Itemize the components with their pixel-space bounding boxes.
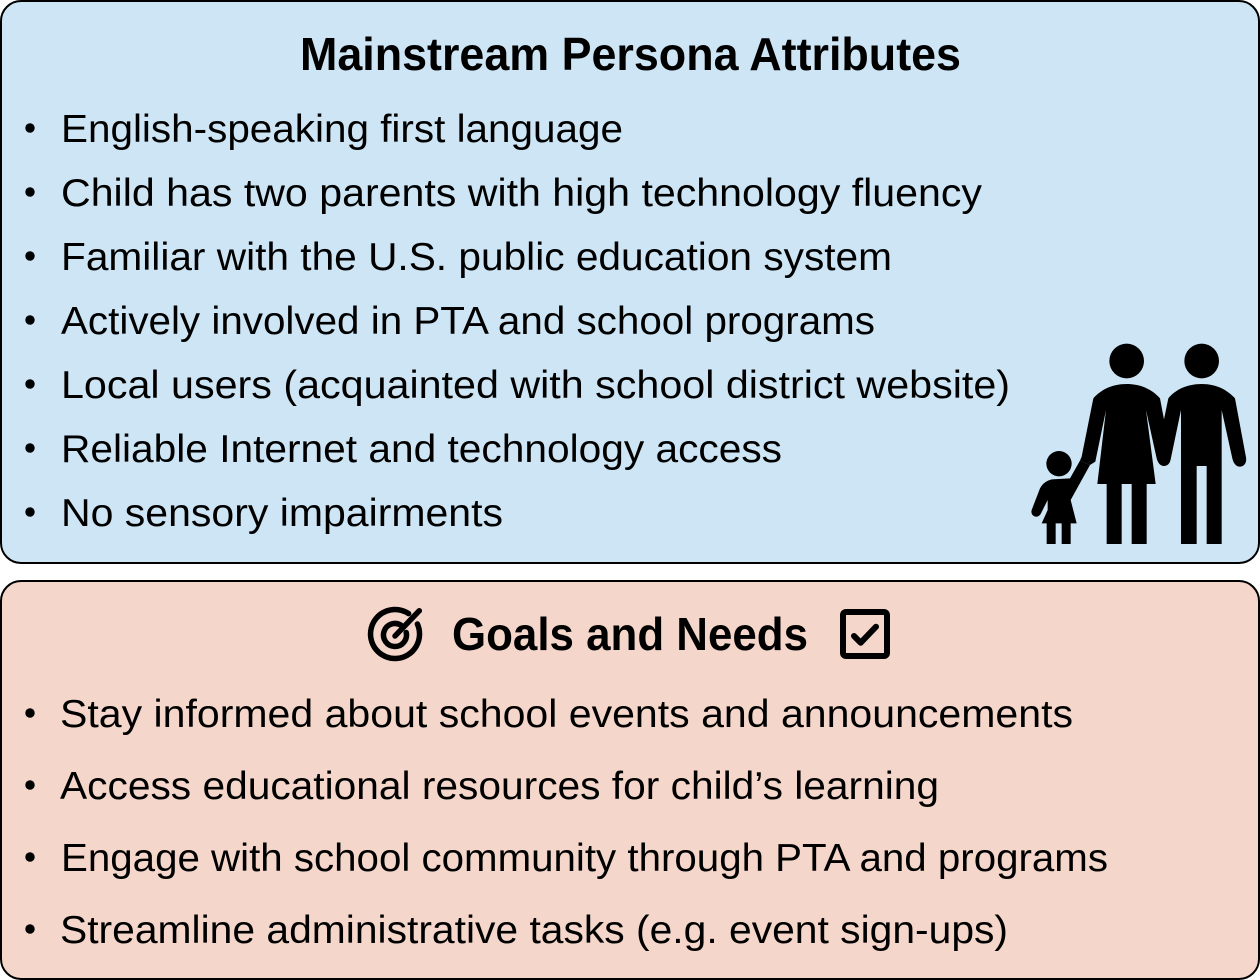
- icon: family silhouette: [1031, 344, 1246, 544]
- panel background: peach: [1, 581, 1259, 979]
- attribute: language: English-speaking first language: [61, 108, 623, 151]
- goal: engage community: Engage with school community through PTA and programs: [61, 837, 1108, 880]
- attribute: PTA involvement: Actively involved in PTA and school programs: [61, 300, 875, 343]
- panel: goals and needs: [1, 581, 1259, 979]
- panel background: blue: [1, 1, 1259, 563]
- attribute: education system: Familiar with the U.S. public education system: [61, 236, 892, 279]
- goal: educational resources: Access educational resources for child’s learning: [60, 765, 939, 808]
- attribute: internet access: Reliable Internet and technology access: [61, 428, 782, 471]
- attribute: sensory: No sensory impairments: [61, 492, 503, 535]
- attribute: parents: Child has two parents with high technology fluency: [61, 172, 983, 215]
- goal: stay informed: Stay informed about school events and announcements: [60, 693, 1073, 736]
- heading: Goals and Needs: Goals and Needs: [452, 608, 808, 660]
- panel: mainstream persona attributes: [1, 1, 1259, 563]
- attribute: local users: Local users (acquainted with school district website): [61, 364, 1010, 407]
- icon: target with arrow: [371, 610, 420, 659]
- icon: checkbox: [843, 612, 887, 656]
- heading: Mainstream Persona Attributes: Mainstream Persona Attributes: [300, 28, 961, 80]
- goal: administrative tasks: Streamline administrative tasks (e.g. event sign-ups): [60, 909, 1008, 952]
